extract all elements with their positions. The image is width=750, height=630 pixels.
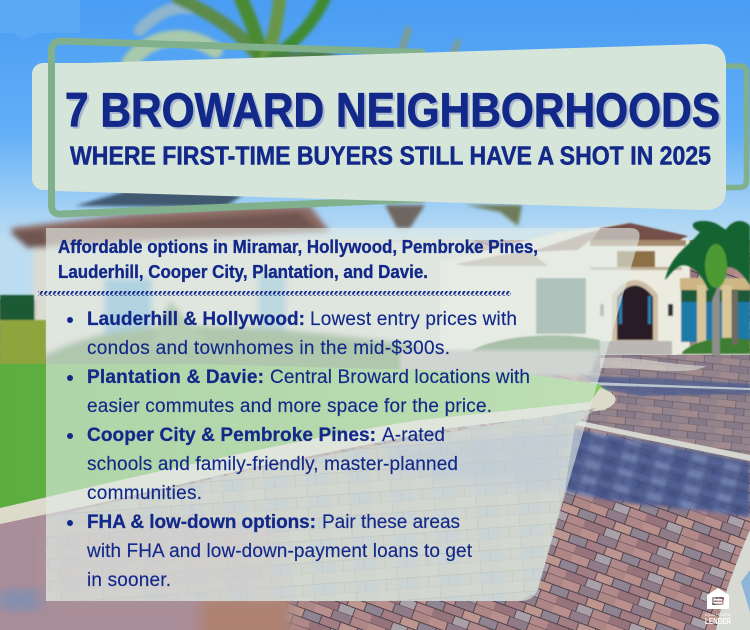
banner: title frame and plate [32, 41, 746, 214]
panel heading: Affordable options in Miramar, Hollywood, Pembroke Pines, [58, 237, 538, 257]
bullet: FHA & low-down options: with FHA and low-down-payment loans to get [86, 541, 473, 562]
banner back plate [32, 63, 722, 190]
driveway upper band [470, 355, 750, 470]
icon: equal housing opportunity: LENDER [705, 617, 731, 626]
bullet: FHA & low-down options [67, 512, 473, 591]
bullet: Plantation & Davie [67, 367, 530, 417]
panel heading: Lauderhill, Cooper City, Plantation, and Davie. [58, 262, 428, 282]
panel heading [58, 237, 538, 282]
bullet: Cooper City & Pembroke Pines: schools and family-friendly, master-planned [87, 454, 458, 475]
pale pavers below panel [46, 408, 596, 601]
bullet: FHA & low-down options: Pair these areas [322, 512, 460, 533]
bullet: Plantation & Davie: Plantation & Davie: [87, 367, 264, 388]
divider [38, 291, 511, 296]
panel: details background [46, 228, 640, 601]
bullet: Plantation & Davie: easier commutes and more space for the price. [87, 396, 492, 417]
bullet: Lauderhill & Hollywood: condos and townhomes in the mid-$300s. [87, 338, 450, 359]
icon: equal housing opportunity: EQUAL HOUSING [705, 612, 731, 617]
bullet: Cooper City & Pembroke Pines: Cooper City & Pembroke Pines: [87, 425, 376, 446]
blurred lower left driveway [0, 500, 290, 630]
bullet: Lauderhill & Hollywood: Lauderhill & Hollywood: [87, 309, 305, 330]
banner frame left [52, 41, 425, 214]
blurred upper palm [130, 0, 458, 62]
curb right [716, 530, 750, 630]
driveway blue shadow [555, 428, 750, 518]
banner frame right [724, 66, 746, 188]
blurred fronds below banner [75, 190, 522, 228]
bullet: Cooper City & Pembroke Pines: A-rated [382, 425, 445, 446]
house [440, 223, 750, 358]
banner main plate [55, 44, 726, 210]
icon: equal housing opportunity [705, 588, 731, 626]
bullet: FHA & low-down options: FHA & low-down options: [87, 512, 316, 533]
bullet: Cooper City & Pembroke Pines [67, 425, 458, 504]
bullet: Cooper City & Pembroke Pines: communities. [87, 483, 202, 504]
left shrubs [0, 295, 46, 366]
bullet: Lauderhill & Hollywood: Lowest entry prices with [310, 309, 517, 330]
lawn [0, 364, 612, 508]
bullet: Plantation & Davie: Central Broward locations with [270, 367, 530, 388]
blue tone on pale pavers [380, 425, 570, 490]
bullet: Lauderhill & Hollywood [67, 309, 517, 359]
pink tone on pale pavers [46, 520, 280, 600]
palm tree right [665, 221, 750, 356]
bullet: FHA & low-down options: in sooner. [87, 570, 171, 591]
driveway light stripe [575, 420, 750, 461]
blurred left house [10, 206, 473, 382]
